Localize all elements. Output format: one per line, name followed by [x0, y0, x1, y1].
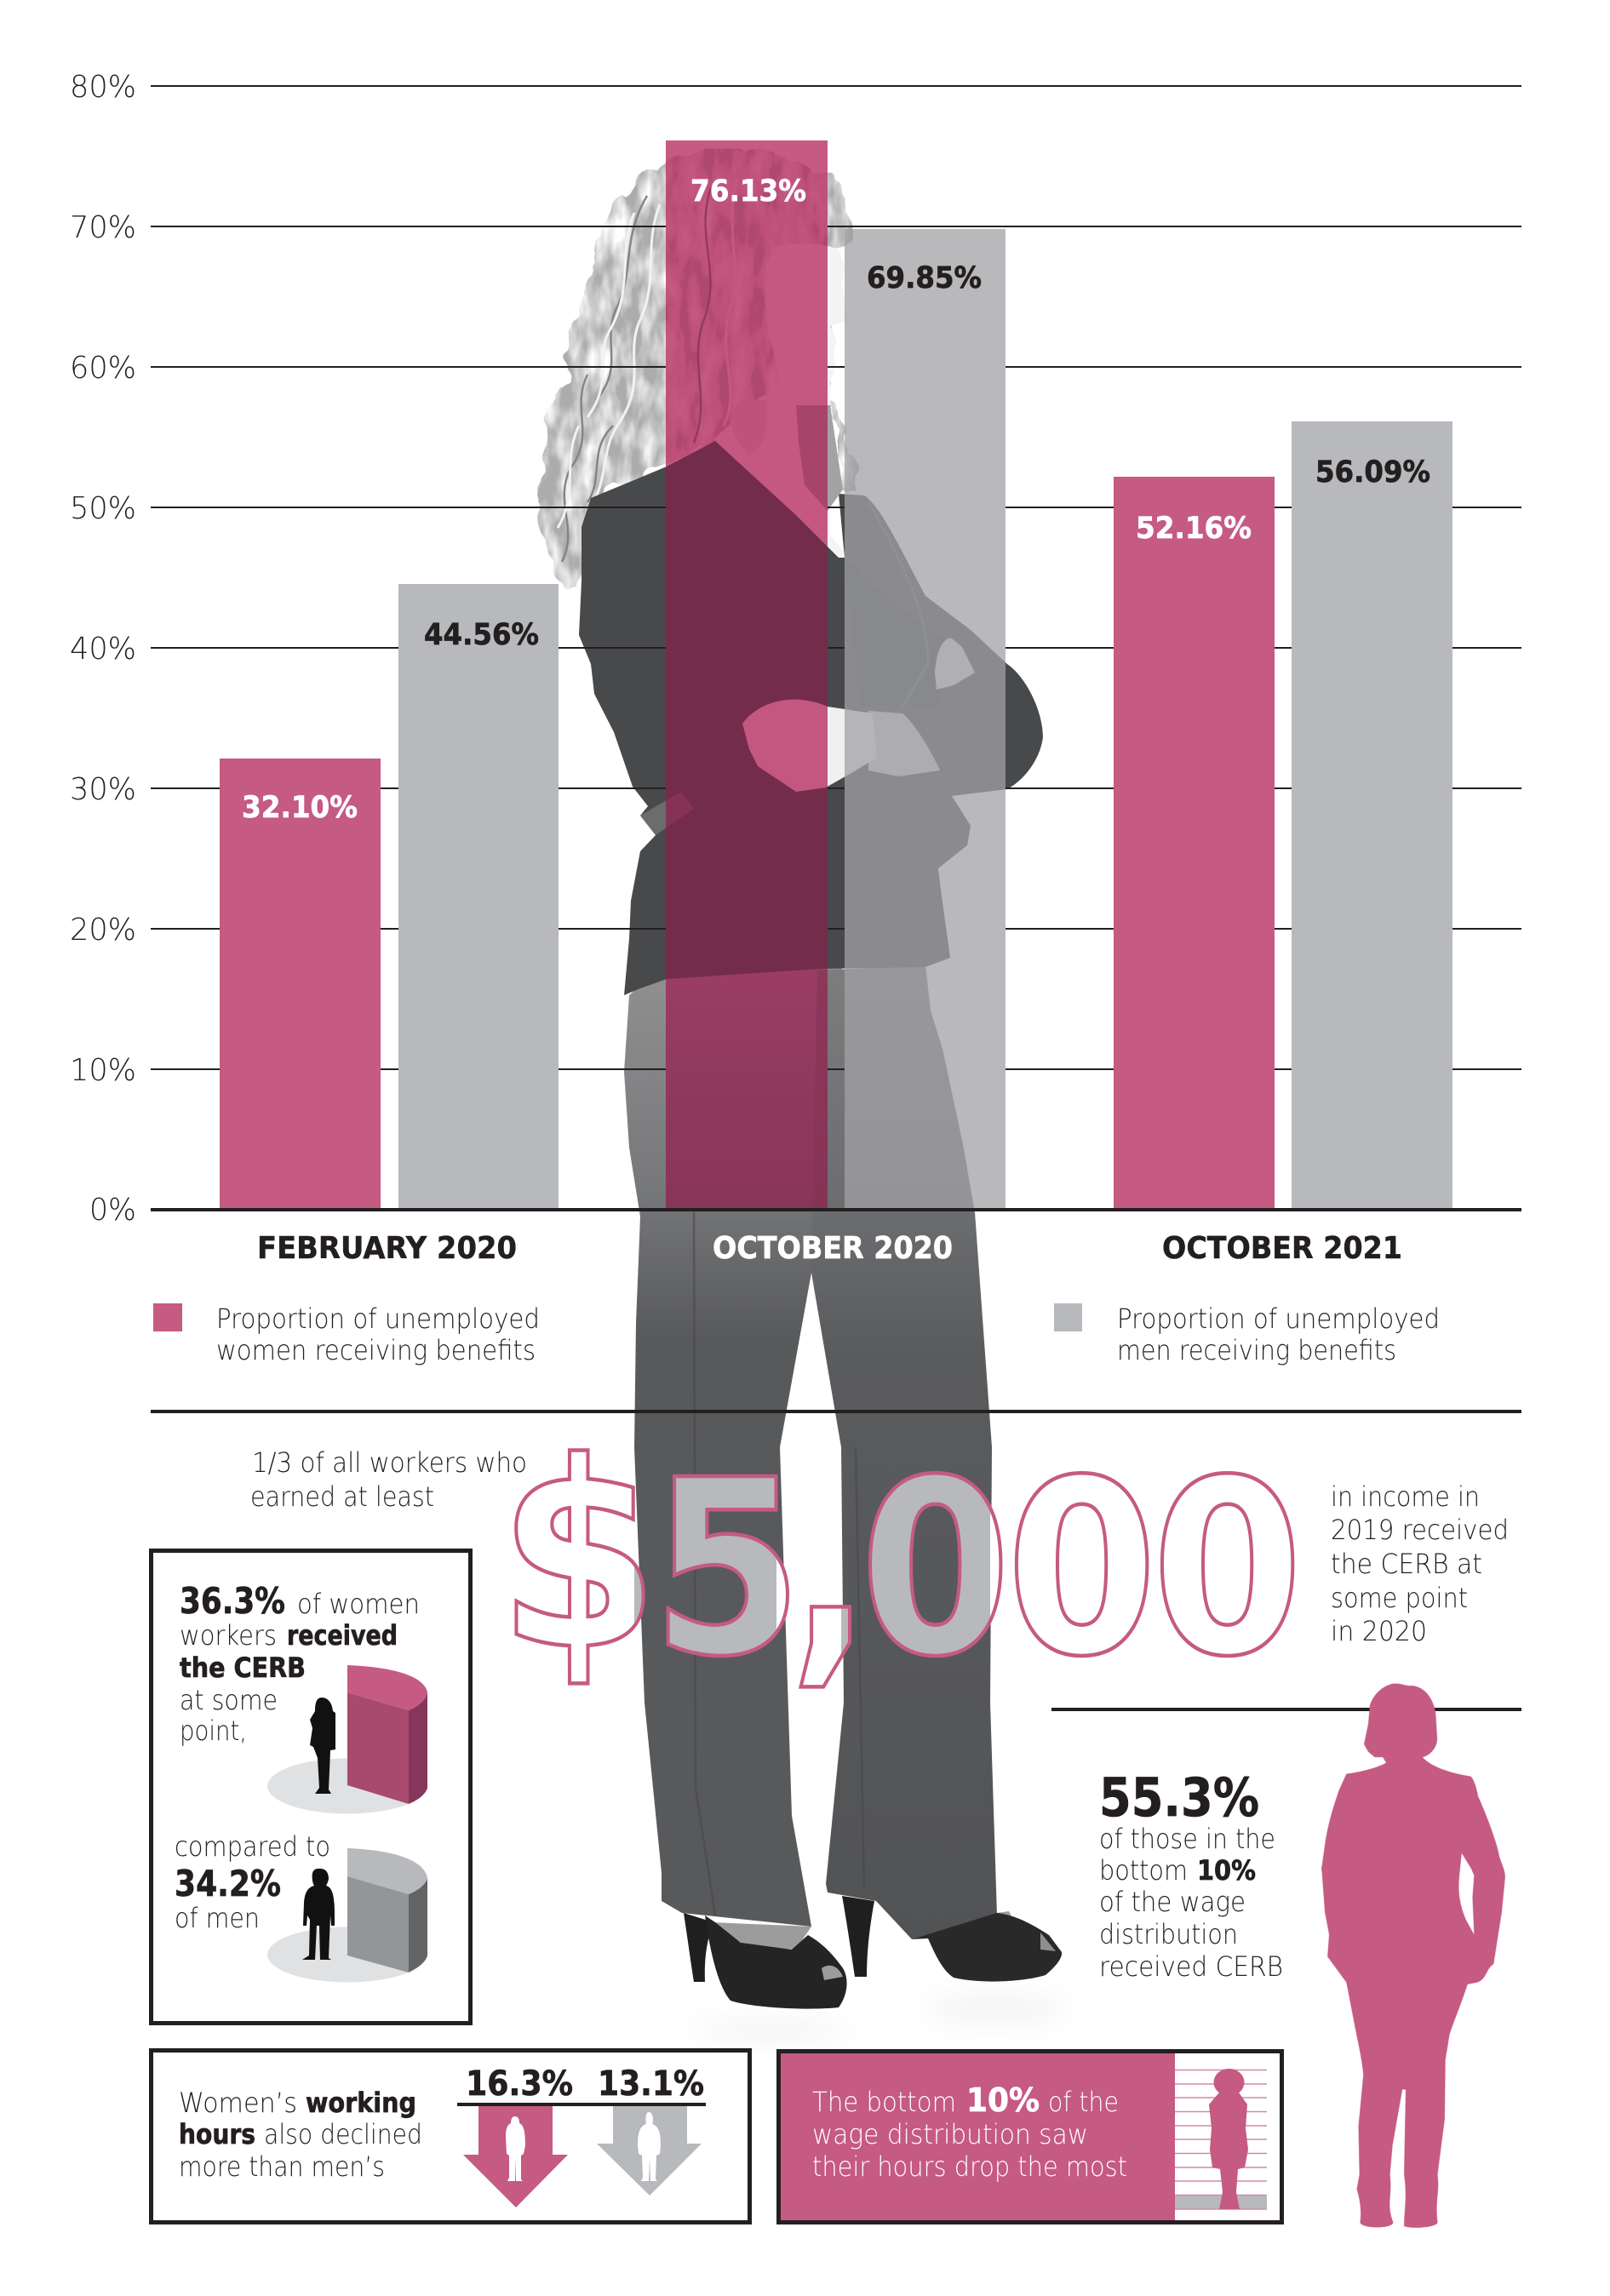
x axis labels: OCTOBER 2021 [1162, 1231, 1402, 1266]
panel: working hours [152, 2050, 749, 2222]
text: income in 2019: 2019 received [1331, 1514, 1509, 1546]
callout: 55.3% bottom 10%: of those in the [1099, 1823, 1275, 1855]
bar chart [220, 140, 1452, 2042]
bars: October 2021: 52.16% [1136, 512, 1252, 546]
callout: 55.3% bottom 10%: 55.3% [1099, 1766, 1259, 1829]
y axis labels: 20% [70, 913, 136, 948]
text: income in 2019: in 2020 [1331, 1615, 1427, 1647]
legend: men: Proportion of unemployed [1117, 1303, 1440, 1335]
men text [175, 1830, 330, 1934]
pants [624, 962, 997, 1939]
photo: standing woman with crossed arms [538, 149, 1064, 2042]
x axis labels: FEBRUARY 2020 [257, 1231, 517, 1266]
bars: October 2020 [538, 140, 1064, 2042]
legend: women [153, 1303, 540, 1366]
y axis labels: 50% [70, 491, 136, 526]
legend: women: Proportion of unemployed [216, 1303, 540, 1335]
bars: February 2020: 44.56% [424, 618, 539, 652]
bottom 10% text: 10% [966, 2081, 1040, 2119]
text: one third of workers: earned at least [250, 1480, 434, 1513]
x axis labels: OCTOBER 2020 [713, 1231, 953, 1266]
men text: compared to [175, 1830, 330, 1863]
women text: the CERB [180, 1652, 306, 1684]
floor shadow [694, 1992, 1064, 2042]
jacket [579, 441, 1043, 995]
bottom 10% text: The bottom [812, 2086, 956, 2118]
panel: bottom 10% hours [778, 2052, 1282, 2222]
figures: 13.1% [598, 2064, 704, 2104]
legend: men: men receiving benefits [1117, 1334, 1396, 1366]
callout: 55.3% bottom 10%: of the wage [1099, 1886, 1246, 1918]
y axis labels: 60% [70, 351, 136, 386]
bottom 10% text: of the [1048, 2086, 1119, 2118]
bars: February 2020 [220, 584, 559, 1209]
working hours text: hours [179, 2118, 255, 2150]
arrow: men down [597, 2106, 702, 2196]
bottom 10% text [812, 2081, 1127, 2183]
icon: pink pie wedge with woman [267, 1665, 427, 1813]
text: one third of workers [250, 1446, 527, 1513]
callout: 55.3% bottom 10%: bottom [1099, 1854, 1188, 1887]
legend: men [1054, 1303, 1440, 1366]
callout: 55.3% bottom 10%: received CERB [1099, 1950, 1283, 1983]
icon: gray pie wedge with man [267, 1848, 427, 1982]
text: income in 2019: some point [1331, 1582, 1468, 1614]
bars: February 2020: 32.10% [242, 791, 358, 825]
figures [466, 2064, 704, 2104]
y axis labels: 30% [70, 772, 136, 807]
bars: October 2021: 56.09% [1315, 455, 1430, 490]
callout: 55.3% bottom 10%: 10% [1197, 1854, 1256, 1887]
text: one third of workers: 1/3 of all workers who [252, 1446, 527, 1479]
panel: CERB recipients by gender [152, 1551, 470, 2023]
bars: October 2021 [1114, 421, 1452, 1209]
callout: 55.3% bottom 10%: distribution [1099, 1918, 1238, 1950]
working hours text: Women’s [179, 2087, 297, 2119]
y axis labels: 40% [70, 632, 136, 667]
hair front strands [796, 405, 843, 511]
men text: 34.2% [175, 1863, 281, 1904]
bottom 10% text: wage distribution saw [812, 2118, 1088, 2150]
women text: point, [180, 1715, 247, 1747]
text: income in 2019: the CERB at [1331, 1548, 1482, 1580]
neck and blouse [713, 379, 845, 558]
big number: $5,000 outline: 5,000 [651, 1428, 1303, 1709]
women text: workers [180, 1619, 277, 1652]
bars: October 2020: 76.13% [690, 175, 806, 209]
hair back [538, 149, 858, 591]
working hours text: working [306, 2087, 416, 2119]
arrow: women down [463, 2106, 568, 2207]
big number: $5,000 outline: $ [498, 1406, 659, 1706]
women text: received [287, 1619, 398, 1652]
x axis labels [257, 1231, 1402, 1266]
y axis labels: 0% [89, 1193, 136, 1228]
figures: 16.3% [466, 2064, 573, 2104]
text: income in 2019: in income in [1331, 1480, 1480, 1513]
hands and cuffs [742, 638, 975, 792]
y axis labels: 80% [70, 70, 136, 105]
icon: woman against height lines [1175, 2069, 1267, 2209]
y axis labels [70, 70, 136, 1228]
working hours text [179, 2087, 422, 2183]
shoes [684, 1896, 1062, 2009]
working hours text: more than men’s [179, 2150, 385, 2183]
face [765, 243, 847, 404]
y axis labels: 70% [70, 210, 136, 245]
working hours text: also declined [264, 2118, 422, 2150]
men text: of men [175, 1902, 260, 1934]
text: income in 2019 [1331, 1480, 1509, 1647]
women text: at some [180, 1684, 278, 1716]
y axis labels: 10% [70, 1053, 136, 1088]
icon: large woman silhouette [1321, 1683, 1505, 2228]
grid lines [151, 86, 1521, 1069]
women text [180, 1580, 420, 1747]
women text: of women [297, 1588, 420, 1620]
bars: October 2020: 69.85% [867, 261, 982, 295]
legend: women: women receiving benefits [216, 1334, 536, 1366]
bottom 10% text: their hours drop the most [812, 2150, 1127, 2183]
women text: 36.3% [180, 1580, 285, 1622]
callout: 55.3% bottom 10% [1099, 1766, 1283, 1983]
